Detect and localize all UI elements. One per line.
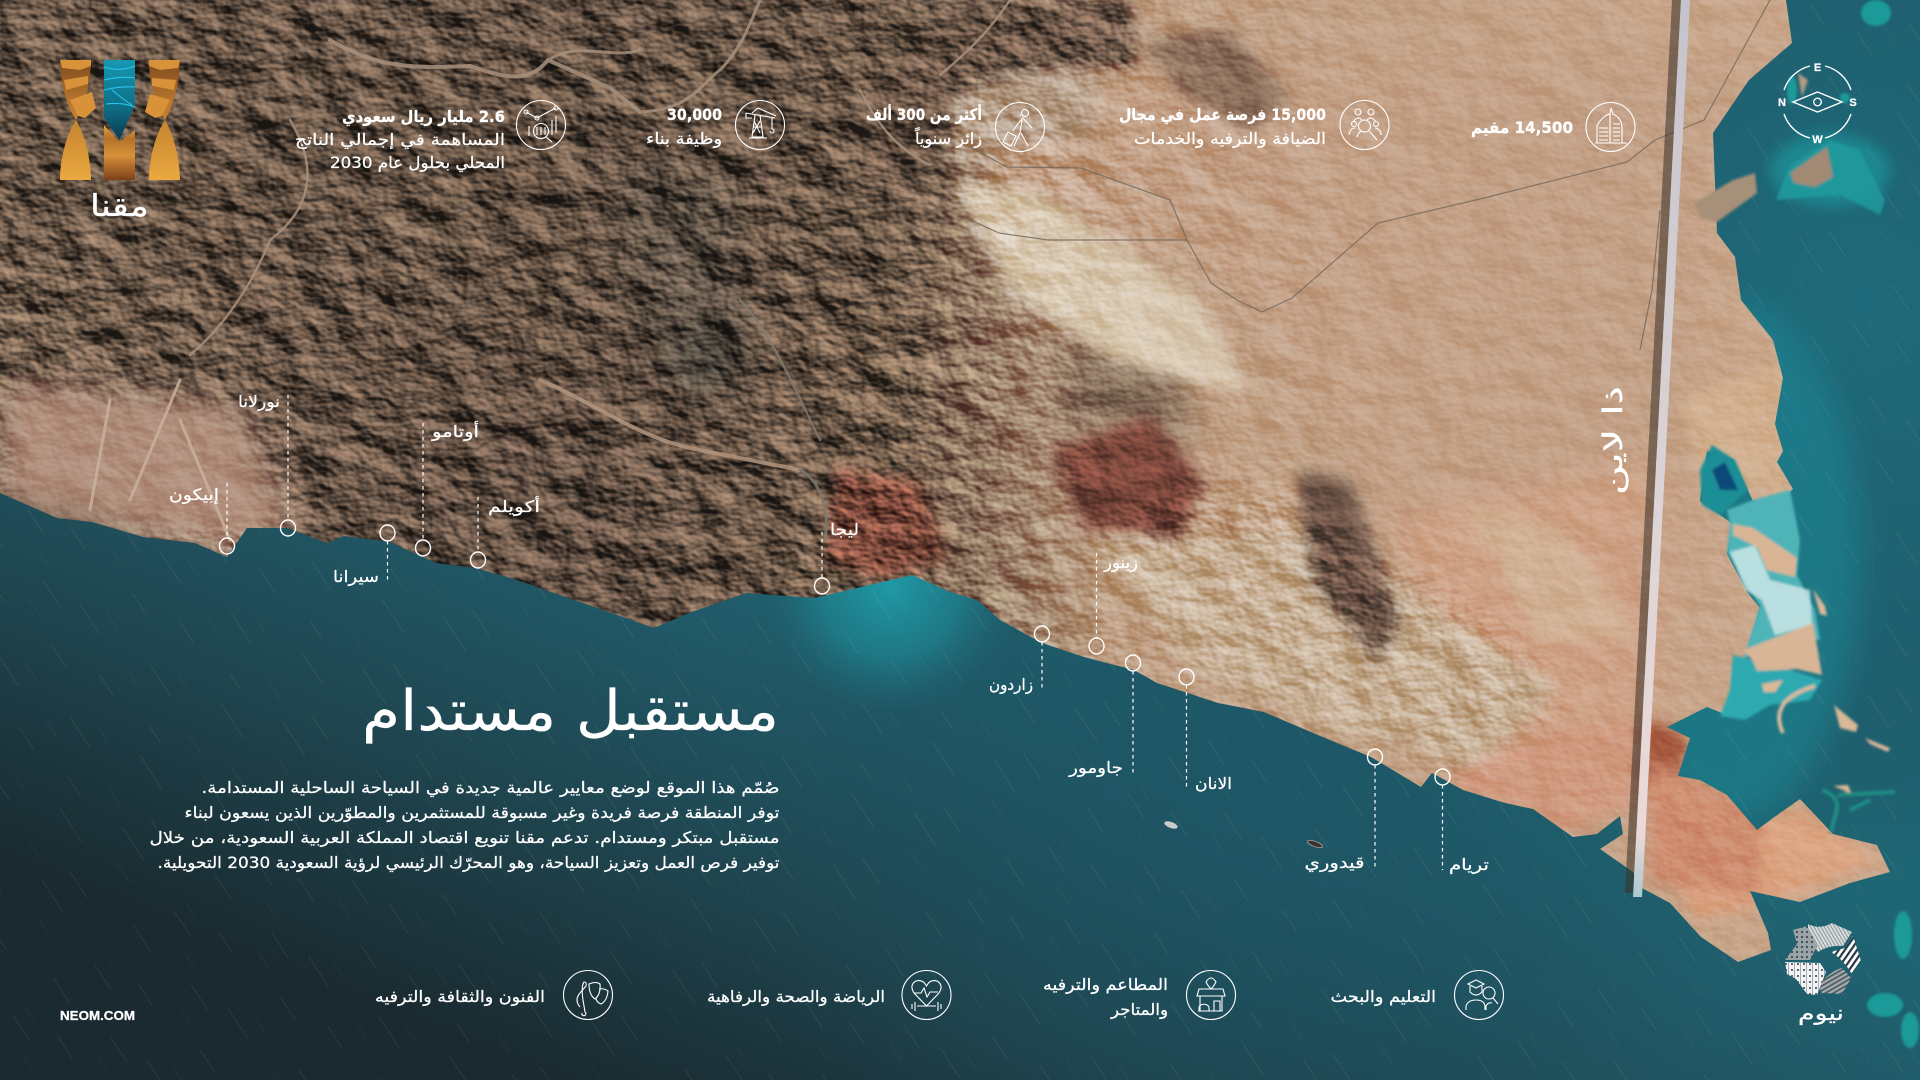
- petal: upper left: [1785, 926, 1817, 960]
- icon: traveller: [996, 102, 1044, 152]
- sector: education: [1330, 970, 1504, 1020]
- label: Zardun: زاردون: [989, 675, 1033, 695]
- compass letters: S: [1849, 97, 1857, 109]
- compass letters: W: [1812, 134, 1823, 146]
- icon: tower: [1586, 102, 1635, 152]
- lagoon: sparkling water: [1727, 490, 1820, 660]
- text: [295, 107, 505, 173]
- icon: chart magnifier: [516, 100, 566, 150]
- text: 2.6 مليار ريال سعودي: [342, 107, 505, 127]
- text: الرياضة والصحة والرفاهية: [707, 987, 885, 1007]
- logo right bar: [149, 60, 180, 180]
- stat: residents: [1471, 102, 1635, 152]
- compass: [1778, 62, 1857, 146]
- text: المساهمة في إجمالي الناتج: [295, 130, 505, 150]
- sector: sport and wellness: [707, 970, 951, 1020]
- label: Jaumur: جاومور: [1068, 758, 1123, 778]
- label: Qidori: قيدوري: [1304, 853, 1364, 873]
- petal: upper right: [1831, 936, 1861, 974]
- islets: north teal: [1787, 0, 1919, 1048]
- label: Norlana: [238, 392, 296, 536]
- text: 15,000 فرصة عمل في مجال: [1119, 105, 1326, 125]
- paragraph: توفير فرص العمل وتعزيز السياحة، وهو المحرّك الرئيسي لرؤية السعودية 2030 التحويلية.: [158, 853, 780, 873]
- lagoon: lower teal: [1720, 655, 1822, 720]
- text: [866, 104, 982, 149]
- heading: مستقبل مستدام: [362, 679, 779, 744]
- stat: GDP contribution: [295, 100, 566, 173]
- label: Alnan: الانان: [1195, 774, 1232, 793]
- label: Epicon: [169, 483, 234, 554]
- icon: crane: [736, 100, 784, 150]
- compass letters: [1778, 62, 1857, 146]
- text: التعليم والبحث: [1330, 987, 1436, 1007]
- logo: Magna: [60, 60, 180, 224]
- label: Tiryam: تريام: [1449, 855, 1489, 875]
- island: small west: [1762, 680, 1783, 692]
- text: والمتاجر: [1110, 1000, 1168, 1020]
- label: Leyja: ليجا: [830, 520, 859, 539]
- footer url: NEOM.COM: [60, 1009, 135, 1023]
- stat: visitors: [866, 102, 1044, 152]
- petal: bottom left: [1785, 962, 1826, 995]
- label: Tiryam: [1435, 769, 1489, 875]
- text: زائر سنوياً: [914, 126, 982, 149]
- island: north peninsula: [1694, 173, 1757, 222]
- label: Sirana: سيرانا: [333, 567, 379, 587]
- strip shadow: [1625, 0, 1681, 893]
- label: Akoilem: أكويلم: [488, 496, 540, 517]
- sector: dining and retail: [1043, 970, 1236, 1020]
- label: Jaumur: [1068, 655, 1140, 778]
- logo name: نيوم: [1798, 1001, 1844, 1025]
- label: Akoilem: [470, 496, 540, 568]
- label: Alnan: [1179, 669, 1232, 793]
- logo centre sand: [104, 125, 135, 180]
- text: الضيافة والترفيه والخدمات: [1134, 129, 1326, 149]
- logo left bar: [60, 60, 91, 180]
- strip: [1633, 0, 1690, 897]
- island: lagoon north: [1733, 524, 1797, 577]
- text: الفنون والثقافة والترفيه: [375, 987, 545, 1007]
- label: Epicon: إبيكون: [169, 485, 219, 505]
- stat: construction jobs: [646, 100, 784, 150]
- text: المحلي بحلول عام 2030: [330, 153, 505, 173]
- reefs south east: [1822, 790, 1895, 832]
- text: 30,000: [667, 105, 722, 124]
- petal: top: [1808, 923, 1852, 952]
- island: north with halo: [1776, 140, 1885, 215]
- map labels: [169, 392, 1489, 875]
- label: Norlana: نورلانا: [238, 392, 280, 412]
- label: Zardun: [989, 626, 1050, 695]
- icon: heart and dumbbell: [902, 970, 951, 1020]
- compass ring: [1784, 66, 1851, 138]
- paragraph: مستقبل مبتكر ومستدام. تدعم مقنا تنويع اقتصاد المملكة العربية السعودية، من خلال: [150, 828, 780, 848]
- paragraph: توفر المنطقة فرصة فريدة وغير مسبوقة للمستثمرين والمطوّرين الذين يسعون لبناء: [184, 803, 780, 823]
- sector: arts and culture: [375, 970, 612, 1020]
- label: The Line: ذا لاين: [1598, 386, 1629, 495]
- text: 14,500 مقيم: [1471, 118, 1573, 137]
- petal: lower right: [1818, 966, 1858, 994]
- label: Leyja: [814, 520, 859, 594]
- paragraph: صُمّم هذا الموقع لوضع معايير عالمية جديدة في السياحة الساحلية المستدامة.: [202, 778, 780, 798]
- label: Zenor: زينور: [1103, 553, 1138, 573]
- compass letters: E: [1814, 62, 1821, 74]
- label: Utamo: أوتامو: [431, 421, 479, 442]
- island: lagoon middle: [1743, 623, 1822, 675]
- icon: graduate: [1454, 970, 1504, 1020]
- text: [646, 105, 722, 149]
- label: Sirana: [333, 525, 395, 587]
- text: المطاعم والترفيه: [1043, 975, 1168, 995]
- logo: NEOM: [1785, 923, 1861, 1025]
- islets: [1813, 589, 1890, 795]
- lagoon: sparkle highlights: [1730, 545, 1812, 635]
- the line strip: [1625, 0, 1690, 897]
- text: [1119, 105, 1326, 149]
- label: Zenor: [1089, 553, 1138, 654]
- logo centre water: [104, 60, 135, 140]
- logo name: مقنا: [90, 189, 149, 224]
- paragraph: [150, 778, 780, 873]
- lagoons and islands east coast: [1694, 0, 1919, 1048]
- icon: shop: [1186, 970, 1236, 1020]
- island: crescent: [1779, 686, 1815, 733]
- wadis: [90, 0, 1010, 540]
- compass letters: N: [1778, 97, 1786, 109]
- stat: hospitality jobs: [1119, 100, 1389, 150]
- label: Qidori: [1304, 749, 1382, 873]
- label: Utamo: [416, 421, 479, 556]
- lagoon: upper: [1700, 445, 1748, 515]
- roads: [960, 0, 1770, 350]
- text: أكثر من 300 ألف: [866, 104, 982, 124]
- text: [1043, 975, 1168, 1020]
- text: وظيفة بناء: [646, 129, 722, 149]
- boats: [1163, 820, 1323, 849]
- icon: masks and music: [564, 970, 612, 1020]
- icon: people magnifier: [1340, 100, 1389, 150]
